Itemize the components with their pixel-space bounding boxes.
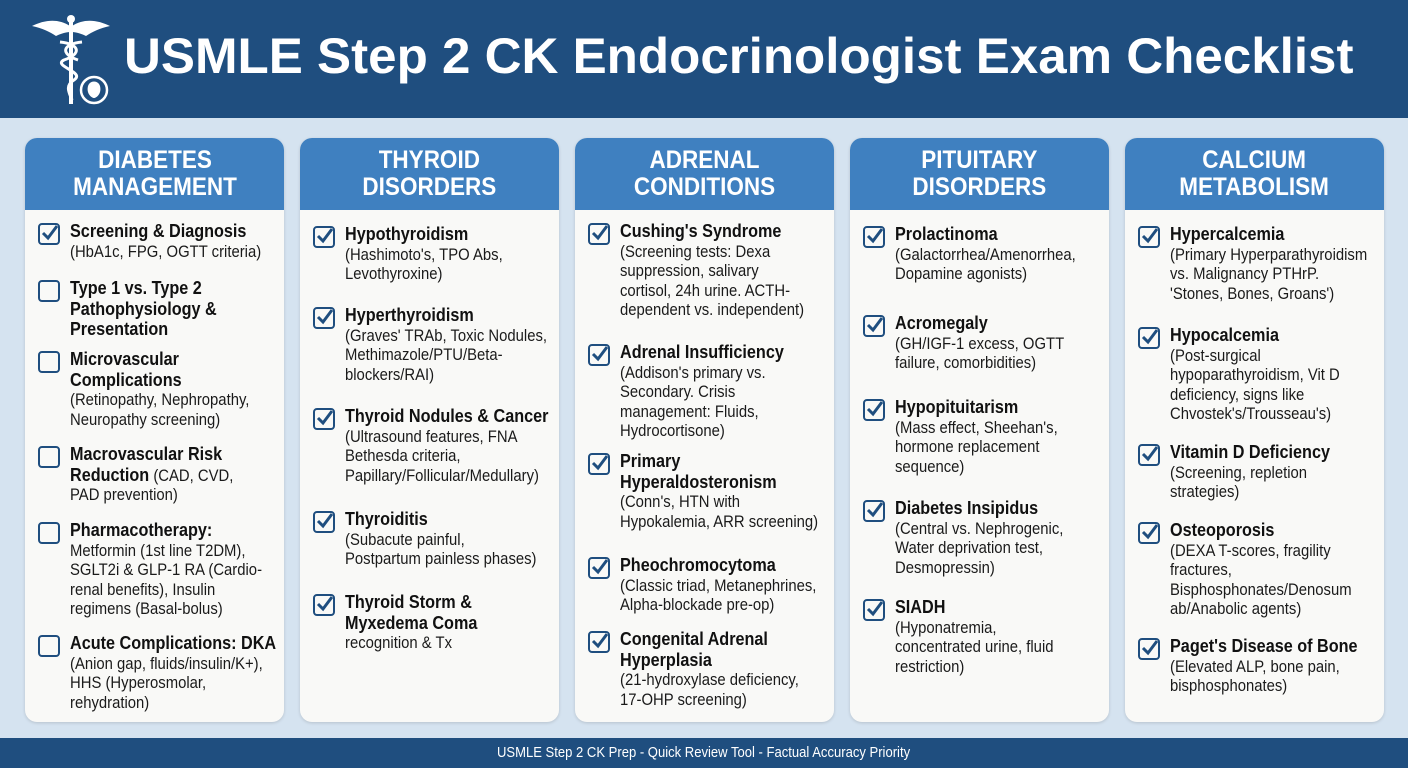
item: hypoparathyroidism, Vit D <box>1170 366 1340 384</box>
item <box>863 498 1063 576</box>
item <box>863 597 1054 676</box>
item: (Hyponatremia, <box>895 618 997 636</box>
item <box>863 313 1064 372</box>
item: blockers/RAI) <box>345 366 434 384</box>
item: (Anion gap, fluids/insulin/K+), <box>70 654 263 672</box>
item: Type 1 vs. Type 2 <box>70 278 202 298</box>
item: (HbA1c, FPG, OGTT criteria) <box>70 242 261 260</box>
item: Hypopituitarism <box>895 397 1018 417</box>
item: Bisphosphonates/Denosum <box>1170 580 1352 598</box>
item: ab/Anabolic agents) <box>1170 600 1301 618</box>
item: Metformin (1st line T2DM), <box>70 542 246 560</box>
item: Hyperthyroidism <box>345 305 474 325</box>
item: restriction) <box>895 658 964 676</box>
item: Acromegaly <box>895 313 988 333</box>
item: (Screening tests: Dexa <box>620 242 770 260</box>
title: USMLE Step 2 CK Endocrinologist Exam Checklist <box>124 28 1353 84</box>
item <box>588 342 784 440</box>
item: (Screening, repletion <box>1170 464 1307 482</box>
panel: thyroid: THYROID <box>379 146 480 174</box>
item <box>588 629 799 708</box>
item: Thyroid Nodules & Cancer <box>345 406 548 426</box>
item: HHS (Hyperosmolar, <box>70 674 206 692</box>
item: PAD prevention) <box>70 486 178 504</box>
item: Hypocalcemia <box>1170 325 1279 345</box>
item: Alpha-blockade pre-op) <box>620 596 774 614</box>
item: Screening & Diagnosis <box>70 221 246 241</box>
item: Neuropathy screening) <box>70 410 220 428</box>
item: (21-hydroxylase deficiency, <box>620 671 799 689</box>
item: Thyroiditis <box>345 509 428 529</box>
item: Hydrocortisone) <box>620 422 725 440</box>
panel: adrenal: CONDITIONS <box>634 173 775 201</box>
panel: pituitary: PITUITARY <box>921 146 1038 174</box>
item: Hyperaldosteronism <box>620 472 777 492</box>
item <box>38 633 276 712</box>
item: Complications <box>70 370 182 390</box>
item: Hyperplasia <box>620 650 712 670</box>
item: bisphosphonates) <box>1170 677 1287 695</box>
item: (Classic triad, Metanephrines, <box>620 576 816 594</box>
item: Acute Complications: DKA <box>70 633 276 653</box>
item: SIADH <box>895 597 945 617</box>
item: Methimazole/PTU/Beta- <box>345 346 503 364</box>
item: strategies) <box>1170 483 1239 501</box>
item: Cushing's Syndrome <box>620 221 781 241</box>
item: (Ultrasound features, FNA <box>345 428 518 446</box>
item <box>1138 224 1367 302</box>
item <box>313 406 548 484</box>
item <box>313 305 547 384</box>
item: Secondary. Crisis <box>620 383 735 401</box>
item <box>38 349 249 428</box>
item <box>1138 520 1352 618</box>
item: deficiency, signs like <box>1170 386 1304 404</box>
item: renal benefits), Insulin <box>70 580 215 598</box>
item: Reduction (CAD, CVD, <box>70 464 233 484</box>
header bar <box>0 0 1408 118</box>
item: management: Fluids, <box>620 402 759 420</box>
item: Hypercalcemia <box>1170 224 1284 244</box>
item: 'Stones, Bones, Groans') <box>1170 284 1334 302</box>
item: Dopamine agonists) <box>895 265 1027 283</box>
icon: caduceus <box>32 15 110 104</box>
item <box>313 592 478 652</box>
item: (Graves' TRAb, Toxic Nodules, <box>345 326 547 344</box>
item: Pharmacotherapy: <box>70 520 212 540</box>
item <box>38 520 262 618</box>
panel: thyroid: DISORDERS <box>363 173 496 201</box>
item: rehydration) <box>70 694 149 712</box>
item: Myxedema Coma <box>345 612 477 632</box>
panel: adrenal <box>575 138 834 722</box>
item: Congenital Adrenal <box>620 629 768 649</box>
item: (Addison's primary vs. <box>620 364 766 382</box>
item: (Post-surgical <box>1170 346 1261 364</box>
item: Microvascular <box>70 349 179 369</box>
item: Osteoporosis <box>1170 520 1274 540</box>
item: SGLT2i & GLP-1 RA (Cardio- <box>70 561 262 579</box>
item: Macrovascular Risk <box>70 444 222 464</box>
item <box>38 278 217 339</box>
item <box>1138 636 1358 695</box>
item: recognition & Tx <box>345 634 452 652</box>
item: Bethesda criteria, <box>345 447 461 465</box>
item: Levothyroxine) <box>345 265 442 283</box>
item <box>588 221 804 319</box>
item: Primary <box>620 451 680 471</box>
item <box>1138 442 1330 501</box>
item: dependent vs. independent) <box>620 301 804 319</box>
item: sequence) <box>895 458 964 476</box>
item: (DEXA T-scores, fragility <box>1170 542 1331 560</box>
footer: USMLE Step 2 CK Prep - Quick Review Tool - Factual Accuracy Priority <box>497 745 911 761</box>
panel: calcium: METABOLISM <box>1180 173 1329 201</box>
item: Chvostek's/Trousseau's) <box>1170 405 1331 423</box>
item: Hypothyroidism <box>345 224 468 244</box>
item <box>313 509 537 568</box>
item: failure, comorbidities) <box>895 354 1036 372</box>
item <box>863 397 1058 476</box>
item: Prolactinoma <box>895 224 998 244</box>
item: (Conn's, HTN with <box>620 493 740 511</box>
item <box>313 224 503 283</box>
item: (Primary Hyperparathyroidism <box>1170 246 1367 264</box>
item: concentrated urine, fluid <box>895 638 1054 656</box>
item: Presentation <box>70 319 168 339</box>
footer <box>0 738 1408 768</box>
panel: pituitary: DISORDERS <box>913 173 1046 201</box>
item: regimens (Basal-bolus) <box>70 600 223 618</box>
item: Adrenal Insufficiency <box>620 342 784 362</box>
item: (Mass effect, Sheehan's, <box>895 418 1058 436</box>
panel: thyroid <box>300 138 559 722</box>
item: Desmopressin) <box>895 558 995 576</box>
item: Paget's Disease of Bone <box>1170 636 1358 656</box>
item: Thyroid Storm & <box>345 592 472 612</box>
item: fractures, <box>1170 561 1232 579</box>
item: suppression, salivary <box>620 262 759 280</box>
item: hormone replacement <box>895 438 1039 456</box>
item: (Elevated ALP, bone pain, <box>1170 658 1340 676</box>
panel: calcium: CALCIUM <box>1203 146 1306 174</box>
panel: diabetes: MANAGEMENT <box>73 173 236 201</box>
item: Water deprivation test, <box>895 539 1043 557</box>
item: Pheochromocytoma <box>620 555 776 575</box>
item: Hypokalemia, ARR screening) <box>620 512 818 530</box>
item: vs. Malignancy PTHrP. <box>1170 265 1319 283</box>
item: (Retinopathy, Nephropathy, <box>70 391 249 409</box>
item: (GH/IGF-1 excess, OGTT <box>895 334 1064 352</box>
item <box>863 224 1076 283</box>
panel: calcium <box>1125 138 1384 722</box>
item <box>588 451 818 530</box>
item: (Central vs. Nephrogenic, <box>895 520 1063 538</box>
item: cortisol, 24h urine. ACTH- <box>620 282 790 300</box>
item: Papillary/Follicular/Medullary) <box>345 466 539 484</box>
item: 17-OHP screening) <box>620 690 747 708</box>
item: Postpartum painless phases) <box>345 550 537 568</box>
item <box>1138 325 1340 423</box>
panel: diabetes: DIABETES <box>98 146 211 174</box>
item: Vitamin D Deficiency <box>1170 442 1330 462</box>
item <box>38 221 261 260</box>
item: (Galactorrhea/Amenorrhea, <box>895 246 1076 264</box>
item <box>588 555 816 614</box>
panel: pituitary <box>850 138 1109 722</box>
item: (Subacute painful, <box>345 530 465 548</box>
item: Diabetes Insipidus <box>895 498 1038 518</box>
item <box>38 444 233 504</box>
item: (Hashimoto's, TPO Abs, <box>345 246 503 264</box>
panel: diabetes <box>25 138 284 722</box>
item: Pathophysiology & <box>70 298 217 318</box>
panel: adrenal: ADRENAL <box>649 146 759 174</box>
